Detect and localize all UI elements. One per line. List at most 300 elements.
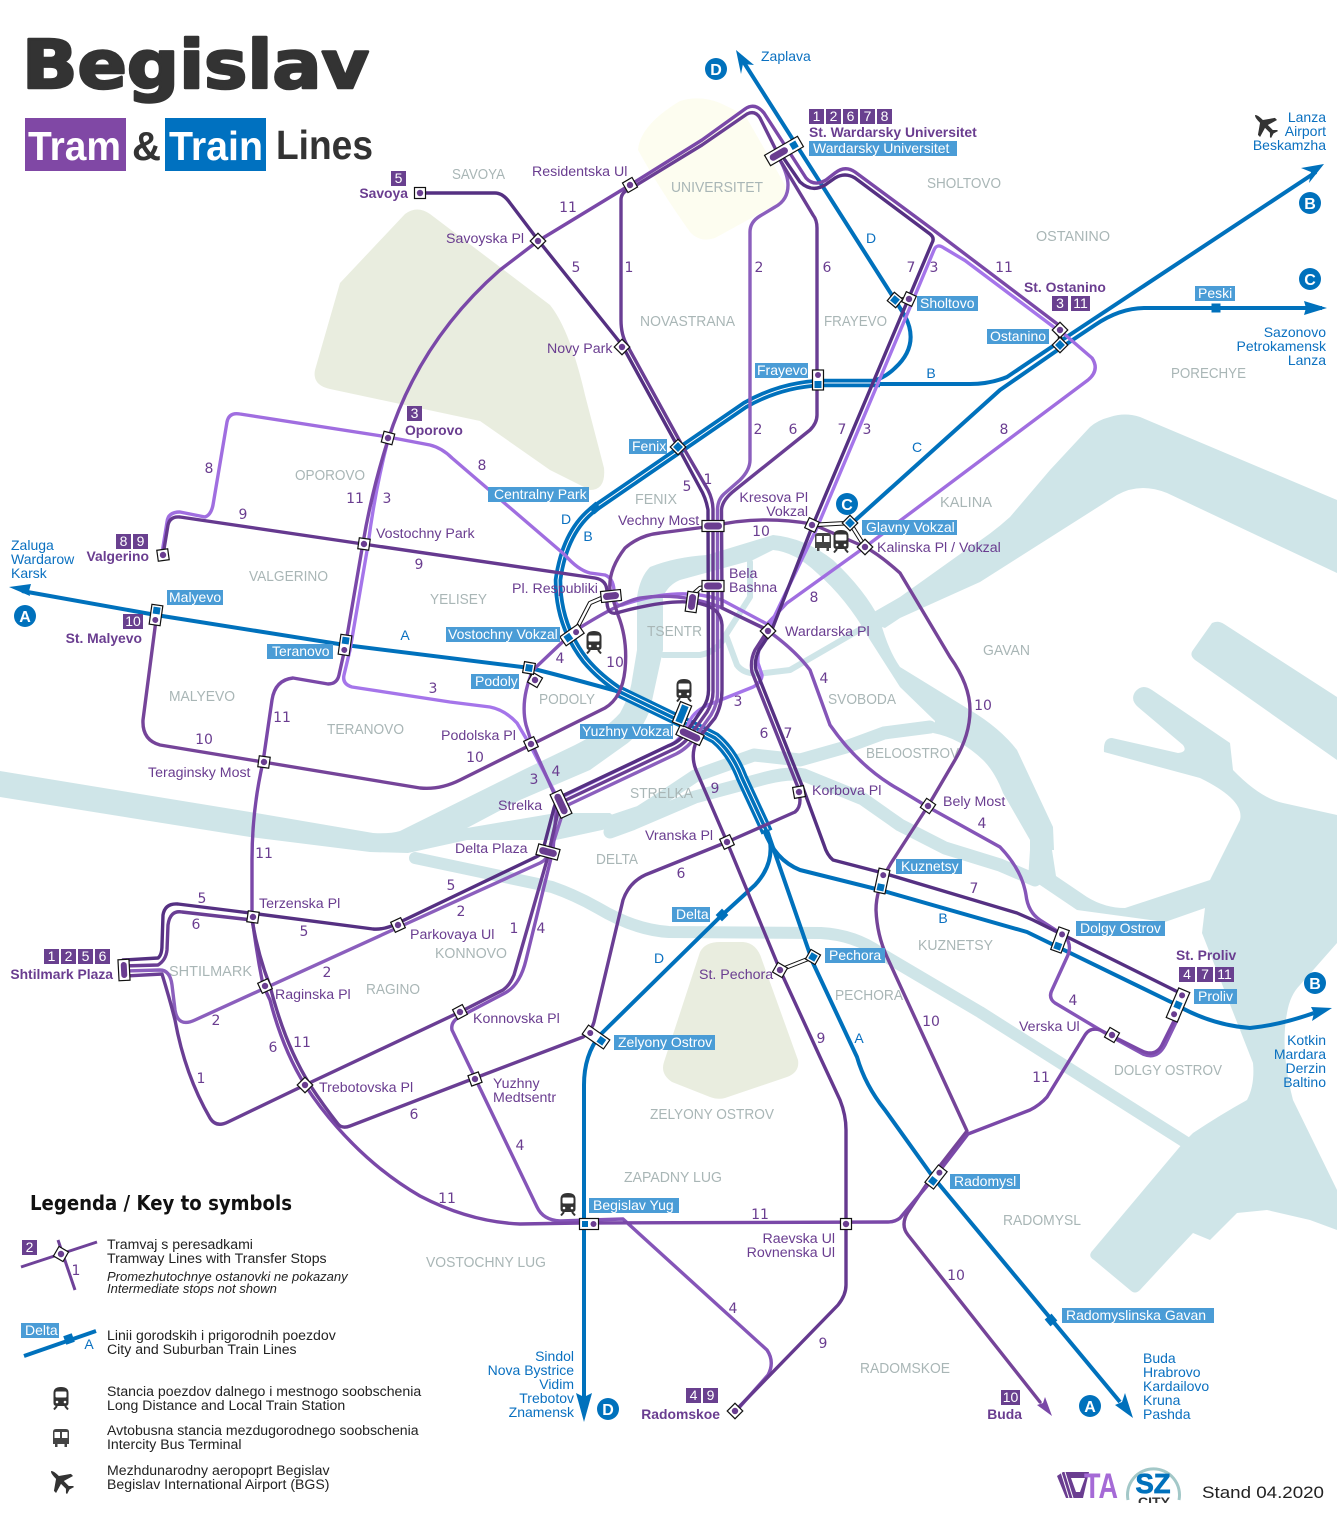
line number markers: 10 [466,750,484,766]
district names: ZELYONY OSTROV [650,1106,774,1123]
destination: line A south: Kruna [1143,1392,1181,1408]
destination: line D south: Trebotov [519,1390,574,1406]
park: Universitet area [638,98,786,240]
label: Teranovo: Teranovo [272,643,330,659]
circle D north [705,58,727,80]
line number markers: 6 [677,866,686,882]
icon: airplane [1247,107,1283,143]
circle D north: D [710,62,722,79]
stop: Podoly [523,662,535,674]
label: Kuznetsy: Kuznetsy [901,858,959,874]
line number markers: 3 [734,694,742,710]
line number markers: 2 [457,904,465,920]
logo: VTA: TA [1084,1467,1118,1506]
circle C east [1299,268,1321,290]
bar stop: Vechny Most [702,520,724,532]
line number markers: 6 [269,1040,278,1056]
tram stop name labels: Bela [729,566,758,582]
label: Wardarsky Universitet: Wardarsky Universitet [813,140,950,156]
destination: line A west: Wardarow [11,551,75,567]
subtitle: Lines: Lines [276,122,373,168]
circle C east: C [1304,272,1316,289]
bar stop: Yuzhny Vokzal [676,725,704,745]
line number markers: 9 [817,1031,825,1047]
district names: STRELKA [630,785,693,802]
train line letters: A [854,1030,864,1046]
stop: Kresova Pl Vokzal [805,518,819,532]
legend text: bus: Intercity Bus Terminal [107,1436,241,1452]
line number markers [192,200,1078,1352]
legend icon: train [54,1387,68,1410]
district names: SHTILMARK [169,963,252,980]
terminal: Radomskoe: 9 [707,1387,715,1403]
tram stop name labels: Terzenska Pl [259,896,340,912]
tram stop name labels: Savoyska Pl [446,231,524,247]
label: Malyevo: Malyevo [169,589,221,605]
terminal: Buda: 10 [1003,1389,1018,1405]
terminal: St. Wardarsky Universitet: 8 [881,108,889,124]
icon: train Glavny Vokzal [834,530,848,552]
legend text: tram: Intermediate stops not shown [107,1281,277,1296]
district names: GAVAN [983,642,1030,659]
terminal names and route badges [10,108,1236,1422]
tram stop name labels: Residentska Ul [532,164,627,180]
logo: VTA [1057,1467,1118,1506]
tram stop name labels: Bely Most [943,794,1005,810]
terminal: Shtilmark Plaza [10,948,113,982]
tram stop name labels: Raginska Pl [275,987,351,1003]
destination: line B east: Derzin [1286,1060,1326,1076]
circle B north-east [1299,192,1321,214]
terminal: St. Proliv: St. Proliv [1176,947,1236,963]
stop: St. Ostanino [1052,322,1068,338]
bar stop: Bela Bashna arc [685,591,699,613]
destination: line B east: Kotkin [1287,1032,1326,1048]
stop: Sholtovo tram [902,292,916,306]
terminal: St. Ostanino: 3 [1056,295,1064,311]
subtitle: ampersand: & [132,123,161,169]
stop: Oporovo [381,431,395,445]
terminal: St. Proliv: 7 [1201,966,1209,982]
tram stop name labels: Podolska Pl [441,728,516,744]
destination: line A south: Buda [1143,1350,1176,1366]
tram stop name labels: Konnovska Pl [473,1011,560,1027]
destination: airport: Beskamzha [1253,137,1326,153]
destination: airport: Airport [1285,123,1326,139]
line number markers: 8 [810,590,818,606]
line number markers: 7 [838,422,846,438]
line 9 [163,517,846,1411]
bar stop: Strelka [550,790,572,818]
circle B east [1304,972,1326,994]
combined stop: Frayevo [812,370,824,390]
train line A west [22,591,620,692]
legend text: tram [107,1236,349,1296]
label: Radomysl: Radomysl [954,1173,1016,1189]
train line C [850,308,1322,525]
stop: Raevska Ul [840,1218,852,1230]
train line letters: A [400,627,410,643]
label: Fenix: Fenix [632,438,666,454]
stop: Podolska Pl [524,737,538,751]
line number markers: 1 [625,260,633,276]
legend text: bus [107,1422,419,1452]
train line D south [584,830,771,1400]
terminal bar: Shtilmark Plaza [118,959,130,981]
bar stop: Pl. Respubliki [600,589,622,603]
destination: line B east: Baltino [1283,1074,1326,1090]
tram stop name labels: Wardarska Pl [785,624,870,640]
stop: Terzenska Pl [247,911,259,923]
destination: line A south: Pashda [1143,1406,1191,1422]
train station name labels [167,140,1237,1323]
line number markers: 6 [823,260,832,276]
line number markers: 5 [683,479,691,495]
district names: NOVASTRANA [640,313,735,330]
tram stop name labels: Kalinska Pl / Vokzal [877,540,1001,556]
stop: Sholtovo [887,292,903,308]
destination: line A south: Kardailovo [1143,1378,1209,1394]
destination: line D south: Sindol [535,1348,574,1364]
destination: line C: Petrokamensk [1237,338,1327,354]
line number markers: 8 [478,458,486,474]
line number markers: 4 [729,1301,738,1317]
line number markers: 10 [606,655,624,671]
train line letters: D [866,230,876,246]
circle A west [14,605,36,627]
line number markers: 11 [346,491,364,507]
legend text: airport: Mezhdunarodny aeropoprt Begislav [107,1462,330,1478]
label: Delta: Delta [676,906,709,922]
tram stop name labels: Rovnenska Ul [747,1245,835,1261]
line number markers: 5 [198,891,206,907]
circle D south [597,1398,619,1420]
label: Dolgy Ostrov: Dolgy Ostrov [1080,920,1161,936]
district names: DELTA [596,851,638,868]
line number markers: 2 [754,422,762,438]
district names: FRAYEVO [824,313,887,330]
line number markers: 1 [704,472,712,488]
tram stop name labels: Verska Ul [1019,1019,1080,1035]
district names: KONNOVO [435,945,507,962]
line 6 [123,160,817,1127]
train line B north-east [880,172,1316,384]
bar stop: St. Wardarsky Universitet [765,136,803,166]
legend symbol: train lines [21,1322,96,1356]
district names: RAGINO [366,981,420,998]
district names: VOSTOCHNY LUG [426,1254,546,1271]
tram stop name labels: Pl. Respubliki [512,581,598,597]
legend symbol: tram lines [21,1239,97,1290]
tram stop name labels: Vechny Most [618,513,699,529]
line number markers: 7 [784,726,792,742]
line number markers: 4 [978,816,987,832]
label: Glavny Vokzal: Glavny Vokzal [866,519,955,535]
line number markers: 5 [572,260,580,276]
stop: Wardarska Pl [760,623,776,639]
train line letters: D [654,950,664,966]
district names: RADOMSKOE [860,1360,950,1377]
terminal: St. Wardarsky Universitet: St. Wardarsky Universitet [809,124,977,140]
district names: UNIVERSITET [671,179,763,196]
destination: line D south: Znamensk [509,1404,575,1420]
terminal: St. Wardarsky Universitet: 2 [830,108,838,124]
stop: Korbova Pl [793,786,805,798]
label: Frayevo: Frayevo [757,362,808,378]
label: Vostochny Vokzal: Vostochny Vokzal [448,626,558,642]
district names: SVOBODA [828,691,896,708]
line number markers: 4 [537,921,546,937]
tram stop name labels: Trebotovska Pl [319,1080,413,1096]
stops and transfer links [149,136,1221,1419]
district names: TSENTR [647,623,702,640]
line number markers: 6 [410,1107,419,1123]
terminal: Shtilmark Plaza: Shtilmark Plaza [10,966,113,982]
combined stop: Kuznetsy [874,868,890,894]
circle C Glavny Vokzal: C [841,497,853,514]
arrow A south [1115,1393,1133,1418]
stop: Savoya [414,188,426,198]
stop: St. Pechora [772,962,788,978]
line number markers: 8 [1000,422,1008,438]
terminal: Valgerino: 8 [120,533,128,549]
line number markers: 2 [323,965,331,981]
stop: Glavny Vokzal [842,515,858,531]
line 8 [162,333,1095,624]
line 4 [452,596,1178,1410]
title: Begislav: Begislav [22,26,369,104]
train line letters: C [912,439,922,455]
line number markers: 1 [197,1071,205,1087]
terminal: St. Malyevo: St. Malyevo [66,630,142,646]
line number markers: 5 [300,924,308,940]
legend text: train: City and Suburban Train Lines [107,1341,297,1357]
subtitle box: Tram: Tram [28,123,121,169]
stop: Residentska Ul [622,177,638,193]
date stamp: Stand 04.2020 [1202,1483,1324,1502]
tram stop name labels: Kresova Pl [739,490,808,506]
line number markers: 9 [415,557,423,573]
line number markers: 7 [907,260,915,276]
line number markers: 11 [995,260,1013,276]
destination: line D south [488,1348,575,1420]
circle B north-east: B [1304,196,1316,213]
icon: train Yuzhny Vokzal [676,679,692,702]
district names: OSTANINO [1036,228,1110,245]
legend text: train [107,1327,336,1357]
stop: Savoyska Pl [530,233,546,249]
terminal: Shtilmark Plaza: 1 [48,948,56,964]
circle A west: A [19,609,31,626]
terminal: St. Wardarsky Universitet: 1 [813,108,821,124]
combined stop: Radomysl [925,1165,947,1189]
bar stop: Yuzhny Vokzal train [672,702,692,726]
line number markers: 6 [760,726,769,742]
line 5 [123,193,708,960]
stop: Radomskoe [727,1403,743,1419]
train lines A, B, D shared [620,692,767,832]
arrow B north-east [1301,164,1324,183]
destination: airport: Lanza [1288,109,1326,125]
train line A south [768,833,1120,1402]
stop: Teraginsky Most [258,756,270,768]
terminal: St. Wardarsky Universitet [809,108,977,140]
label: Radomyslinska Gavan: Radomyslinska Gavan [1066,1307,1206,1323]
legend text: airport [107,1462,330,1492]
stop: Podoly tram [527,672,543,688]
logo: SZ City: SZ [1136,1468,1170,1499]
line number markers: 11 [1032,1070,1050,1086]
destination: line A west [11,537,75,581]
icon: bus terminal [815,533,831,551]
train line letters: D [561,511,571,527]
stop: Delta [716,909,728,921]
circle C Glavny Vokzal [836,493,858,515]
stop: Valgerino [157,549,169,561]
terminal: Radomskoe [641,1387,720,1422]
terminal: Savoya: 5 [395,170,403,186]
terminal: Savoya [359,170,408,201]
line number markers: 11 [559,200,577,216]
label: Ostanino: Ostanino [990,328,1046,344]
terminal: Shtilmark Plaza: 6 [99,948,107,964]
line 3 [344,246,1055,797]
district names: ZAPADNY LUG [624,1169,722,1186]
district names: OPOROVO [295,467,365,484]
stop: Peski [1212,304,1220,312]
terminal: Oporovo: 3 [411,405,419,421]
line number markers: 11 [438,1191,456,1207]
circle D south: D [602,1402,614,1419]
terminal: Valgerino [86,533,149,564]
terminal: Oporovo: Oporovo [405,422,463,438]
line number markers: 4 [556,651,565,667]
label: Peski: Peski [1198,285,1232,301]
destination: line D south: Vidim [539,1376,574,1392]
combined stop: Begislav Yug [580,1218,598,1230]
terminal: St. Proliv: 4 [1183,966,1191,982]
subtitle box: Train: Train [169,123,263,169]
destination: line D south: Nova Bystrice [488,1362,574,1378]
line number markers: 4 [552,764,561,780]
arrow B east [1311,1007,1332,1021]
stop: Konnovska Pl [453,1005,467,1019]
stop: Trebotovska Pl [297,1077,313,1093]
tram stop name labels: Yuzhny [493,1076,540,1092]
terminal: Oporovo [405,405,463,438]
label: Proliv: Proliv [1198,988,1233,1004]
line 2 [125,160,788,1022]
tram stop name labels: Raevska Ul [762,1231,835,1247]
bar stop: Bela Bashna [702,580,724,592]
line number markers: 6 [789,422,798,438]
line number markers: 3 [429,681,437,697]
circle A south [1079,1395,1101,1417]
line number markers: 10 [922,1014,940,1030]
district names: KALINA [940,494,992,511]
combined stop: Proliv [1166,988,1190,1022]
terminal: Shtilmark Plaza: 2 [65,948,73,964]
line number markers: 9 [239,507,247,523]
line number markers: 3 [530,772,538,788]
legend text: tram: Tramvaj s peresadkami [107,1236,253,1252]
combined stop: Malyevo [149,604,163,626]
terminal: St. Malyevo: 10 [125,613,141,629]
stop: Parkovaya Ul [391,918,405,932]
legend symbol: tram lines: 1 [72,1263,80,1279]
district names: TERANOVO [327,721,404,738]
train lines B and D shared [558,383,880,692]
district names: RADOMYSL [1003,1212,1081,1229]
train line letters [400,230,948,1046]
legend text: train: Linii gorodskih i prigorodnih poezdov [107,1327,336,1343]
circle A south: A [1084,1399,1096,1416]
tram stop name labels: Korbova Pl [812,783,881,799]
tram stop name labels: Strelka [498,798,542,814]
terminal: Radomskoe: Radomskoe [641,1406,720,1422]
line 10 [143,520,1040,1402]
line number markers: 11 [273,710,291,726]
terminal: Shtilmark Plaza: 5 [82,948,90,964]
stop: Verska Ul [1104,1027,1120,1043]
terminal: Savoya: Savoya [359,185,408,201]
legend text: long distance: Stancia poezdov dalnego i mestnogo soobschenia [107,1383,421,1399]
stop: Bely Most [920,798,936,814]
terminal: Valgerino: 9 [137,533,145,549]
destination: line C: Lanza [1288,352,1326,368]
line number markers: 4 [1069,993,1078,1009]
district names: PODOLY [539,691,595,708]
tram stop name labels: Teraginsky Most [148,765,251,781]
terminal: Buda: Buda [987,1406,1022,1422]
title [22,26,373,171]
tram lines [123,106,1178,1411]
destination: line A west: Karsk [11,565,48,581]
legend text: tram: Promezhutochnye ostanovki ne pokazany [107,1269,349,1284]
park: Zelyony Ostrov [663,942,798,1099]
train line letters: B [583,528,593,544]
district names [169,166,1246,1377]
label: Yuzhny Vokzal: Yuzhny Vokzal [582,723,673,739]
stop: Fenix [670,439,686,455]
line number markers: 11 [293,1035,311,1051]
legend heading: Legenda / Key to symbols [30,1191,292,1215]
legend symbol: train lines: Delta [25,1322,58,1338]
tram stop name labels: Novy Park [547,341,613,357]
stop: Yuzhny Medtsentr [468,1072,482,1086]
combined stop: Dolgy Ostrov [1051,927,1069,953]
tram stop name labels: Vokzal [766,504,808,520]
arrow 10 south [1037,1397,1052,1416]
district names: DOLGY OSTROV [1114,1062,1222,1079]
line number markers: 10 [947,1268,965,1284]
destination: line C [1237,324,1327,368]
logo: SZ City: CITY [1138,1495,1170,1509]
label: Podoly: Podoly [475,673,518,689]
water bodies [0,414,1337,1292]
train line D north [741,58,911,382]
line number markers: 10 [195,732,213,748]
line number markers: 4 [516,1138,525,1154]
transfer links [529,299,1060,970]
terminal: St. Malyevo [66,613,143,646]
destination: line A south: Hrabrovo [1143,1364,1201,1380]
line number markers: 1 [510,921,518,937]
terminal: St. Ostanino [1024,279,1106,311]
arrow A west [9,584,31,596]
terminal: St. Wardarsky Universitet: 6 [847,108,855,124]
combined stop: Vostochny Vokzal [560,624,584,646]
